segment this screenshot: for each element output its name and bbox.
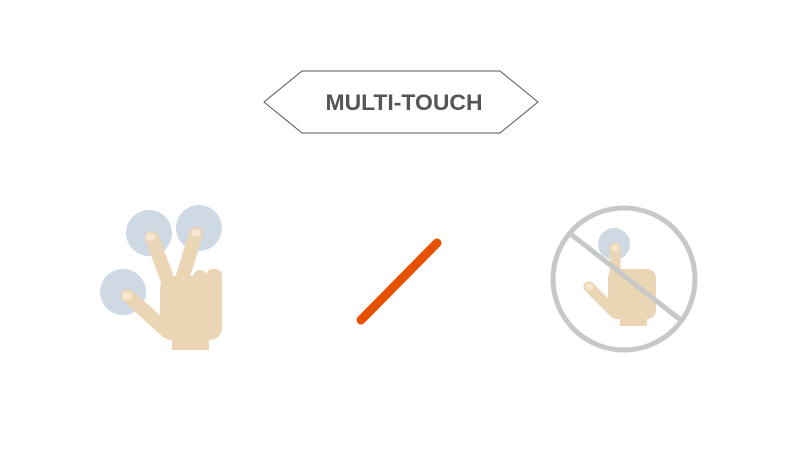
- icon: multi-touch hand: [100, 205, 222, 350]
- icon: no single touch: [553, 208, 695, 350]
- title: [264, 71, 538, 133]
- slash divider: [361, 243, 437, 320]
- title: MULTI-TOUCH: [326, 90, 482, 115]
